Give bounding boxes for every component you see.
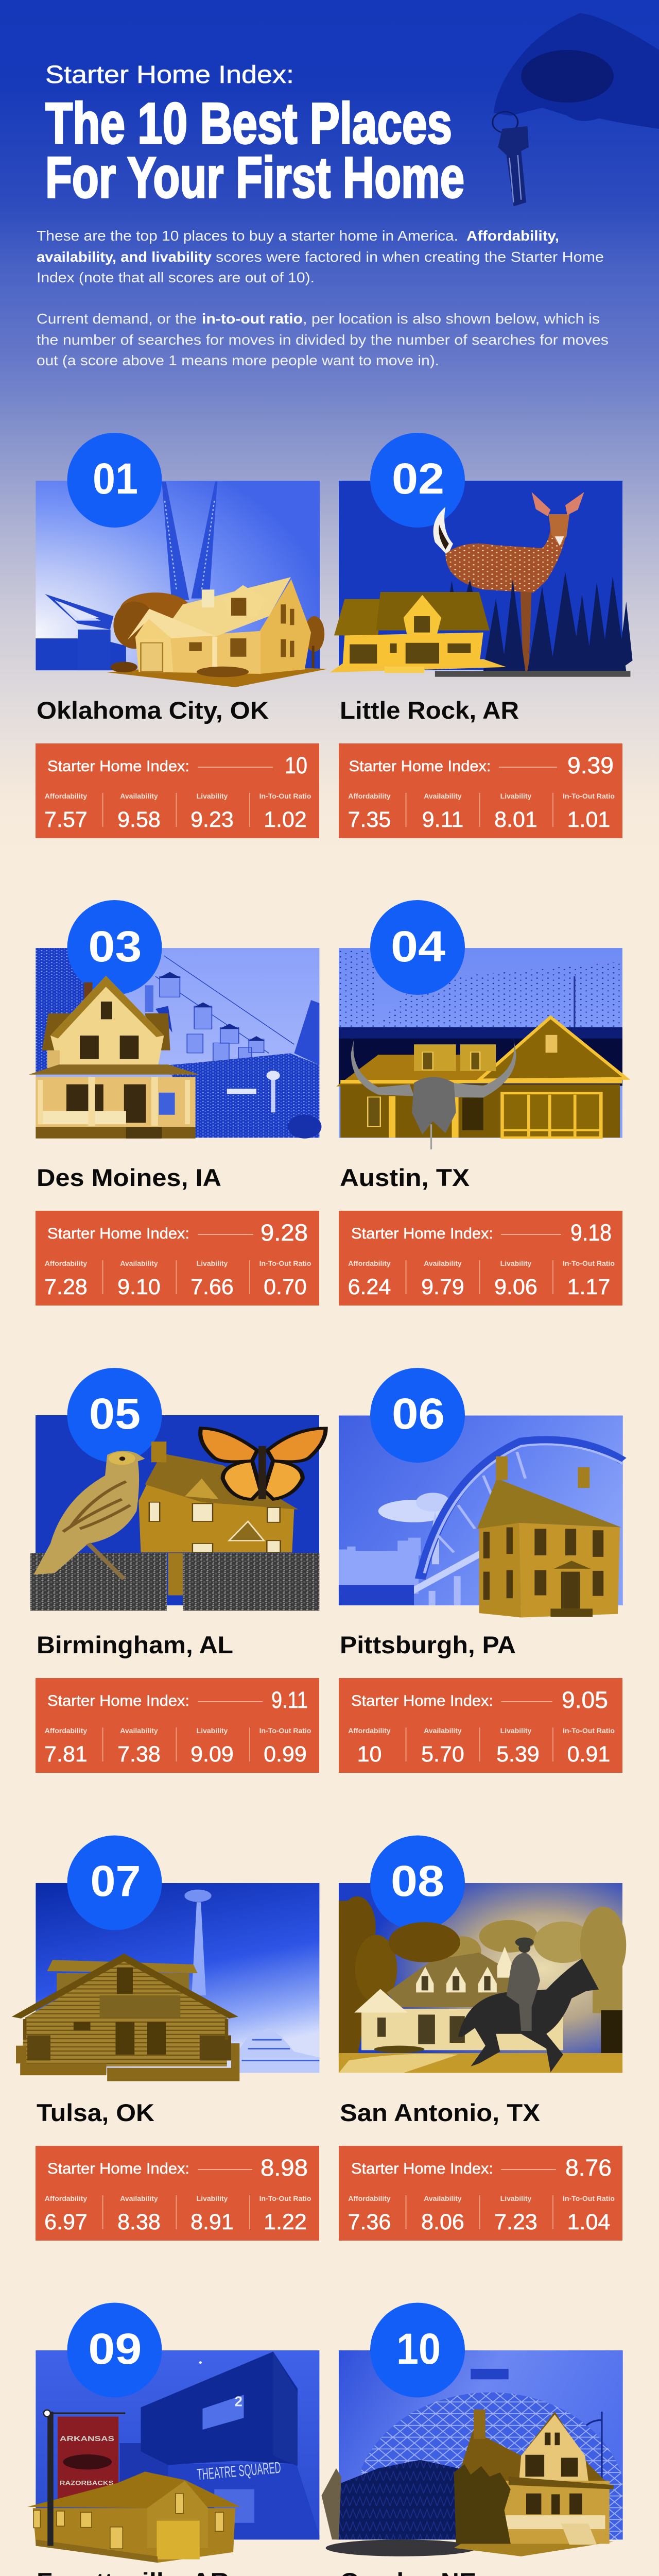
header [37,13,659,368]
number badge [370,1835,465,1930]
score card: 1.02 [264,807,307,832]
in-to-out paragraph: , per location is also shown below, which is [303,311,600,327]
score card: Livability [500,2194,532,2202]
title [45,91,464,210]
number badge [67,433,162,528]
score card: 7.36 [348,2210,391,2234]
city name: Des Moines, IA [37,1164,221,1191]
illustration: theatre, Razorbacks flag and house: ARKANSAS [60,2434,114,2443]
intro paragraph: Index (note that all scores are out of 10). [37,269,315,285]
number badge [67,1368,162,1463]
score card: 9.10 [117,1275,161,1299]
score card: Livability [500,1259,532,1267]
city name: Oklahoma City, OK [37,697,269,724]
city name: Little Rock, AR [340,697,519,724]
score card [339,743,622,838]
icon: hand holding keys [493,13,659,207]
intro paragraph: scores were factored in when creating the Starter Home [216,249,604,265]
score card [339,1211,622,1306]
score card: 9.05 [562,1687,608,1713]
score card: In-To-Out Ratio [259,1259,311,1267]
score card: 9.79 [421,1275,464,1299]
score card: Affordability [348,1259,391,1267]
number badge: 06 [392,1389,445,1438]
illustration: backdrop panel [339,481,622,670]
score card: 6.97 [44,2210,88,2234]
score card: In-To-Out Ratio [563,1726,615,1735]
number badge [370,2303,465,2398]
number badge [67,1835,162,1930]
number badge [67,900,162,995]
page background gradient [0,0,659,856]
score card: 5.39 [496,1742,540,1767]
city name: Tulsa, OK [37,2099,154,2126]
illustration: deer, trees and house [330,492,633,677]
number badge [370,1368,465,1463]
intro paragraph: Affordability, [466,228,559,244]
score card: Livability [197,1726,228,1735]
panel: 08 San Antonio [339,1835,626,2241]
score card: Availability [424,2194,462,2202]
in-to-out paragraph [37,311,609,368]
score card: 0.70 [264,1275,307,1299]
score card: 9.06 [494,1275,537,1299]
number badge: 05 [89,1389,141,1438]
score card: 8.98 [261,2155,308,2181]
score card: 6.24 [348,1275,391,1299]
score card: 7.38 [117,1742,161,1767]
illustration: theatre, Razorbacks flag and house [27,2350,319,2563]
score card: Starter Home Index: [351,1225,493,1242]
intro paragraph: These are the top 10 places to buy a starter home in America. [37,228,458,244]
score card: Livability [197,2194,228,2202]
intro paragraph [37,228,604,285]
score card: 9.28 [261,1219,308,1246]
number badge: 09 [88,2325,142,2373]
score card: Availability [120,1726,158,1735]
title: The 10 Best Places [45,91,452,156]
panel: 10 Omaha [321,2303,623,2576]
score card: In-To-Out Ratio [259,2194,311,2202]
illustration: backdrop of sky ride and crowd [36,948,321,1139]
city name: Austin, TX [340,1164,470,1191]
score card: 0.99 [264,1742,307,1767]
in-to-out paragraph: the number of searches for moves in divided by the number of searches for moves [37,332,609,348]
score card: 7.57 [44,807,88,832]
subtitle: Starter Home Index: [45,61,294,89]
score card: 7.28 [44,1275,88,1299]
panel: 04 Austin [336,900,626,1306]
number badge [370,900,465,995]
score card: Affordability [348,792,391,800]
score card: In-To-Out Ratio [563,792,615,800]
illustration: backdrop panel [36,1415,319,1605]
panel: 01 Oklahoma City [36,433,328,838]
score card: 7.35 [348,807,391,832]
panel: 07 Tulsa [12,1835,319,2241]
score card: Affordability [45,1726,87,1735]
score card: 5.70 [421,1742,464,1767]
in-to-out paragraph: out (a score above 1 means more people want to move in). [37,352,439,368]
illustration: bird, butterfly, cottage and hedges [30,1428,326,1611]
number badge: 07 [91,1857,141,1905]
illustration: tree canopy over badge [389,1922,460,1962]
illustration: farmhouse [29,976,200,1139]
panel: 03 Des Moines [29,900,321,1306]
score card [339,2146,622,2241]
number badge [370,433,465,528]
illustration: crane, skyline and house [36,481,328,687]
score card: In-To-Out Ratio [563,2194,615,2202]
score card: Availability [120,1259,158,1267]
score card [339,1678,622,1773]
number badge: 01 [93,454,138,503]
score card: Availability [424,792,462,800]
in-to-out paragraph: in-to-out ratio [202,311,303,327]
score card [36,1211,319,1306]
score card: 9.11 [422,807,463,832]
score card: Starter Home Index: [47,758,189,775]
city name: Birmingham, AL [37,1631,233,1658]
score card: Affordability [45,792,87,800]
score card: 7.66 [190,1275,234,1299]
score card: Affordability [348,1726,391,1735]
number badge: 10 [396,2325,441,2373]
score card: Livability [500,792,532,800]
score card: 8.76 [565,2155,612,2181]
score card: Starter Home Index: [47,2160,189,2177]
score card: In-To-Out Ratio [259,792,311,800]
score card [36,1678,319,1773]
number badge: 02 [392,454,444,503]
score card: Starter Home Index: [47,1692,189,1709]
score card: Availability [424,1259,462,1267]
score card: 1.01 [567,807,610,832]
score card: 10 [285,752,307,778]
panel: 09 Fayetteville [27,2303,319,2576]
score card: 8.01 [494,807,537,832]
illustration: theatre, Razorbacks flag and house: THEATRE SQUARED [196,2459,282,2484]
score card: Livability [197,1259,228,1267]
number badge: 03 [88,922,142,971]
score card: Starter Home Index: [351,1692,493,1709]
score card: Starter Home Index: [47,1225,189,1242]
panel: 02 Little Rock [330,433,633,838]
title: For Your First Home [45,145,464,210]
score card: 9.11 [271,1687,308,1713]
score card: 10 [357,1742,381,1767]
score card [36,743,319,838]
score card: 7.81 [44,1742,88,1767]
illustration: backdrop with house and trees [339,1883,626,2073]
score card: 9.18 [570,1219,612,1246]
panel: 05 Birmingham [30,1368,326,1773]
score card: 9.39 [567,752,614,778]
score card: 9.09 [190,1742,234,1767]
score card: In-To-Out Ratio [259,1726,311,1735]
score card: 9.23 [190,807,234,832]
score card: 8.91 [190,2210,234,2234]
illustration: spire, skyline and log cabin [12,1883,319,2081]
score card: Livability [197,792,228,800]
score card: 8.38 [117,2210,161,2234]
score card [36,2146,319,2241]
score card: 1.17 [567,1275,610,1299]
score card: 7.23 [494,2210,537,2234]
illustration: geodesic dome, corn and house [321,2350,623,2556]
illustration: bridge, skyline and brick house [339,1416,623,1618]
score card: Affordability [45,2194,87,2202]
score card: Affordability [348,2194,391,2202]
number badge [67,2303,162,2398]
illustration: theatre, Razorbacks flag and house: RAZORBACKS [60,2479,113,2486]
score card: Availability [424,1726,462,1735]
score card: Starter Home Index: [351,2160,493,2177]
score card: Availability [120,2194,158,2202]
illustration: bats, bridge, house and longhorn skull [336,948,626,1149]
city name: San Antonio, TX [340,2099,540,2126]
score card: 8.06 [421,2210,464,2234]
number badge: 04 [391,922,445,971]
intro paragraph: availability, and livability [37,249,212,265]
illustration: theatre, Razorbacks flag and house: 2 [234,2393,242,2409]
score card: 1.22 [264,2210,307,2234]
score card: In-To-Out Ratio [563,1259,615,1267]
score card: 0.91 [567,1742,610,1767]
in-to-out paragraph: Current demand, or the [37,311,197,327]
score card: Availability [120,792,158,800]
city name: Pittsburgh, PA [340,1631,516,1658]
score card: 1.04 [567,2210,610,2234]
number badge: 08 [391,1857,444,1905]
score card: Livability [500,1726,532,1735]
panel: 06 Pittsburgh [339,1368,623,1773]
score card: Affordability [45,1259,87,1267]
score card: Starter Home Index: [349,758,491,775]
score card: 9.58 [117,807,161,832]
